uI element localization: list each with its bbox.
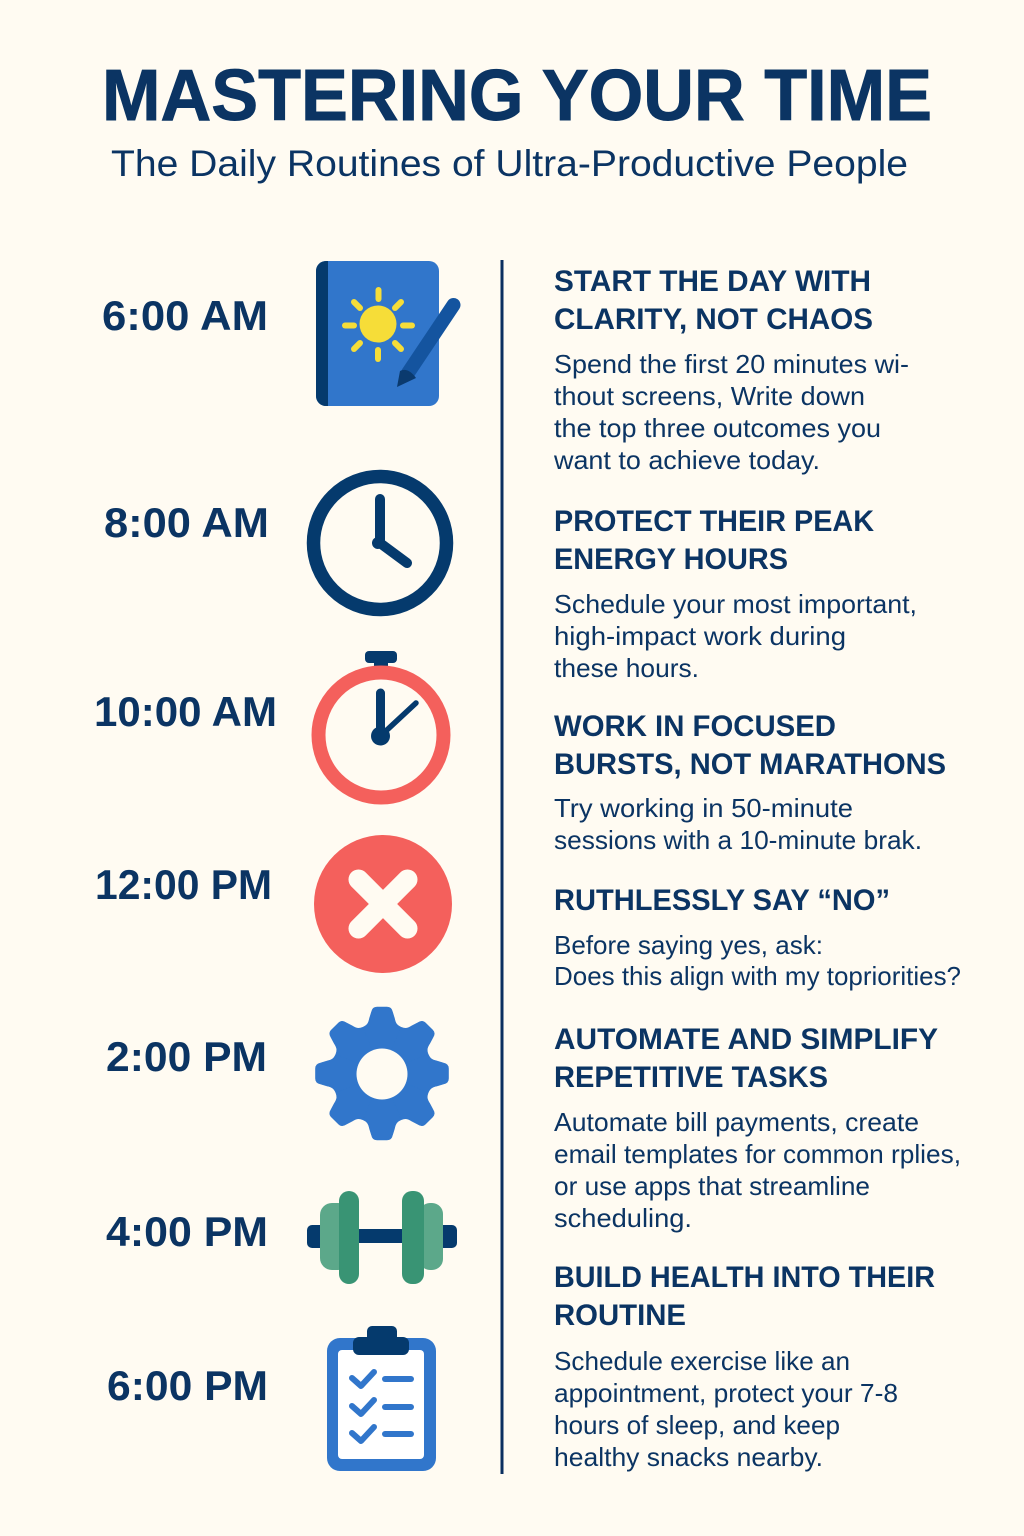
- text block: health: ROUTINE: [554, 1299, 686, 1332]
- text block: automate: REPETITIVE TASKS: [554, 1061, 828, 1094]
- text block: say no: RUTHLESSLY SAY “NO”: [554, 884, 890, 917]
- icon: red cross circle: [314, 835, 452, 973]
- time: 6:00 PM: 6:00 PM: [107, 1362, 268, 1409]
- text block: peak energy: high-impact work during: [554, 621, 846, 651]
- time: 8:00 AM: 8:00 AM: [104, 499, 269, 546]
- time: 10:00 AM: 10:00 AM: [94, 688, 277, 735]
- text block: say no: Does this align with my topriorities?: [554, 961, 961, 991]
- text block: automate: AUTOMATE AND SIMPLIFY: [554, 1023, 938, 1056]
- time: 12:00 PM: 12:00 PM: [95, 861, 272, 908]
- text block: automate: or use apps that streamline: [554, 1171, 870, 1201]
- text block: health: healthy snacks nearby.: [554, 1442, 823, 1472]
- text block: health: [554, 1261, 935, 1472]
- icon: clock: [314, 476, 446, 610]
- text block: automate: [554, 1023, 961, 1233]
- text block: peak energy: these hours.: [554, 653, 699, 683]
- subtitle: The Daily Routines of Ultra-Productive People: [111, 143, 908, 184]
- icon: clipboard checklist: [327, 1326, 436, 1471]
- text block: start the day: START THE DAY WITH: [554, 265, 871, 298]
- text block: peak energy: [554, 505, 917, 683]
- text block: peak energy: Schedule your most important,: [554, 589, 917, 619]
- text block: automate: scheduling.: [554, 1203, 692, 1233]
- title: MASTERING YOUR TIME: [102, 56, 932, 136]
- text block: health: appointment, protect your 7-8: [554, 1378, 898, 1408]
- text block: start the day: the top three outcomes you: [554, 413, 881, 443]
- text block: focused bursts: BURSTS, NOT MARATHONS: [554, 748, 946, 781]
- text block: start the day: [553, 265, 909, 475]
- text block: start the day: Spend the first 20 minutes wi-: [554, 349, 909, 379]
- text block: start the day: want to achieve today.: [553, 445, 820, 475]
- text block: peak energy: ENERGY HOURS: [554, 543, 788, 576]
- text block: start the day: CLARITY, NOT CHAOS: [554, 303, 873, 336]
- icon: notebook with sun and pencil: [316, 261, 454, 406]
- icon: dumbbell: [307, 1191, 457, 1284]
- text block: say no: [554, 884, 961, 991]
- time: 6:00 AM: 6:00 AM: [102, 292, 268, 339]
- text block: start the day: thout screens, Write down: [554, 381, 865, 411]
- time: 2:00 PM: 2:00 PM: [106, 1033, 267, 1080]
- text block: health: Schedule exercise like an: [554, 1346, 850, 1376]
- text block: focused bursts: [554, 710, 946, 855]
- text block: focused bursts: Try working in 50-minute: [554, 793, 853, 823]
- text block: say no: Before saying yes, ask:: [554, 930, 823, 960]
- text block: automate: Automate bill payments, create: [554, 1107, 919, 1137]
- time: 4:00 PM: 4:00 PM: [106, 1208, 268, 1255]
- icon: gear: [316, 1007, 448, 1140]
- text block: health: BUILD HEALTH INTO THEIR: [554, 1261, 935, 1294]
- text block: focused bursts: sessions with a 10-minute brak.: [554, 825, 922, 855]
- text block: focused bursts: WORK IN FOCUSED: [554, 710, 836, 743]
- text block: peak energy: PROTECT THEIR PEAK: [554, 505, 874, 538]
- icon: stopwatch: [318, 651, 444, 798]
- text block: health: hours of sleep, and keep: [554, 1410, 840, 1440]
- text block: automate: email templates for common rplies,: [554, 1139, 961, 1169]
